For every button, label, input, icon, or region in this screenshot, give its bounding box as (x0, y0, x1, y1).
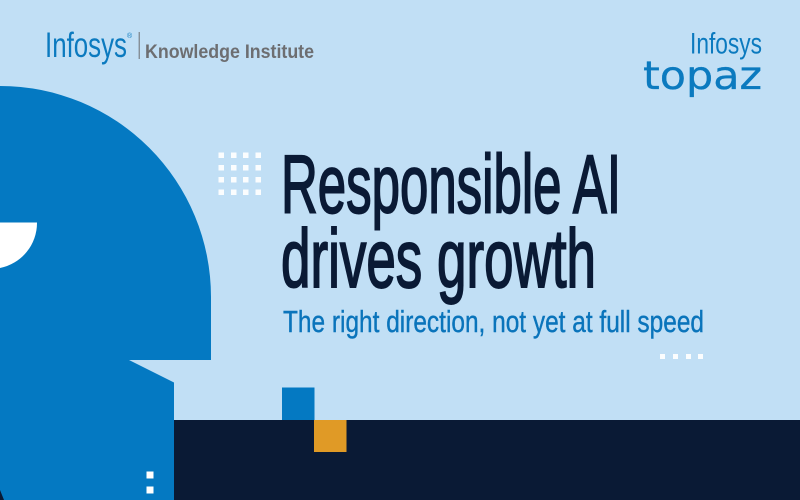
logo: Infosys Knowledge Institute: Infosys (45, 26, 127, 65)
head silhouette (0, 86, 211, 500)
dot row (660, 354, 703, 359)
icon: eye (0, 222, 37, 268)
logo: Infosys topaz: Infosys (690, 28, 762, 60)
title: drives growth (281, 212, 596, 305)
logo: Infosys topaz (643, 28, 762, 99)
logo: Infosys Knowledge Institute: ® (127, 32, 133, 40)
logo: Infosys Knowledge Institute: Knowledge Institute (145, 42, 314, 63)
decorative squares (282, 388, 346, 452)
logo: Infosys topaz: topaz (643, 54, 762, 99)
title (281, 138, 621, 305)
collar dots (146, 472, 154, 494)
footer band (174, 420, 800, 500)
dot grid (218, 152, 261, 195)
logo: Infosys Knowledge Institute (45, 26, 314, 65)
